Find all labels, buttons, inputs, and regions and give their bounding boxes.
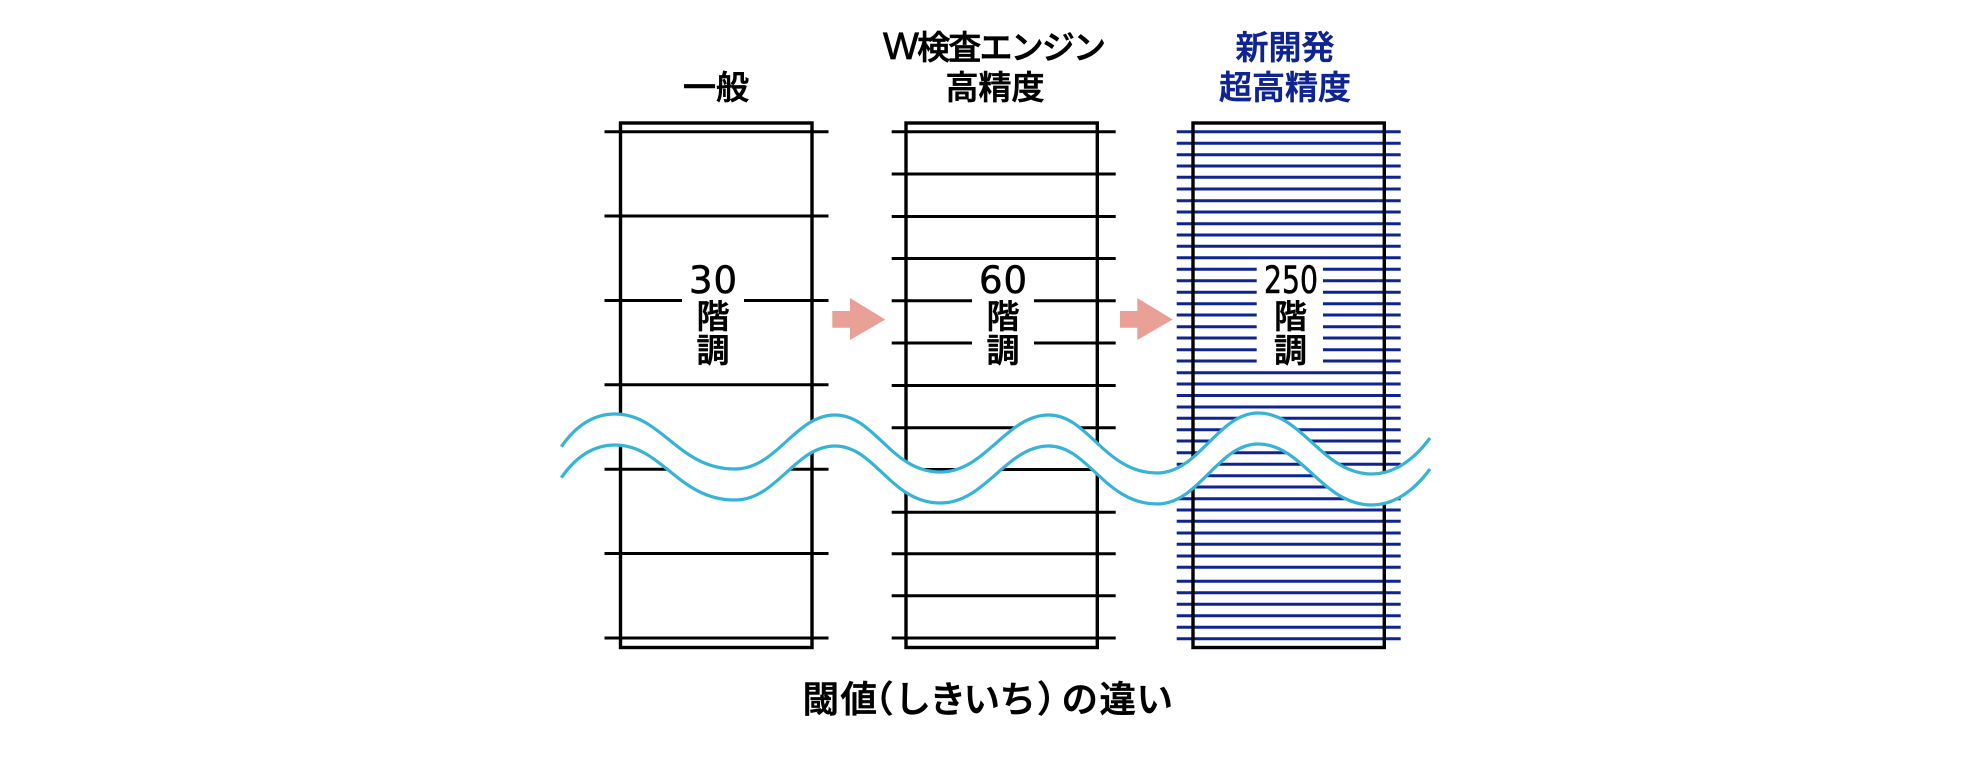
threshold lines: 60 levels bbox=[892, 132, 1116, 638]
chart: 30 levels bbox=[604, 123, 828, 648]
label: 30 levels: 30 bbox=[689, 259, 737, 302]
heading: W inspection engine high precision bbox=[883, 26, 1106, 106]
wave break band bbox=[561, 413, 1430, 505]
chart: 60 levels bbox=[892, 123, 1116, 648]
threshold lines: 250 levels bbox=[1177, 132, 1401, 639]
label: 250 levels bbox=[1264, 259, 1318, 369]
label: 250 levels: 調 bbox=[1274, 332, 1307, 369]
caption: threshold difference: 閾値（しきいち）の違い bbox=[802, 679, 1173, 720]
label: 250 levels: 階 bbox=[1274, 298, 1307, 335]
scale box: 250 levels bbox=[1193, 123, 1384, 648]
heading: W inspection engine high precision: W検査エンジン bbox=[883, 26, 1106, 68]
heading: newly developed ultra high precision bbox=[1219, 29, 1351, 106]
scale box: 30 levels bbox=[620, 123, 812, 648]
label: 250 levels: 250 bbox=[1264, 259, 1318, 302]
label: 60 levels: 調 bbox=[986, 332, 1020, 369]
chart: 250 levels bbox=[1177, 123, 1401, 648]
label: 60 levels: 60 bbox=[979, 259, 1027, 302]
arrow: high precision to ultra high precision bbox=[1120, 298, 1173, 340]
heading: newly developed ultra high precision: 新開発 bbox=[1236, 29, 1334, 66]
label: 60 levels: 階 bbox=[986, 298, 1020, 335]
arrow: general to high precision bbox=[832, 298, 885, 340]
heading: newly developed ultra high precision: 超高精度 bbox=[1219, 69, 1351, 106]
label: 30 levels: 調 bbox=[696, 332, 730, 369]
label: 30 levels: 階 bbox=[696, 298, 730, 335]
heading: general: 一般 bbox=[683, 69, 749, 106]
scale box: 60 levels bbox=[906, 123, 1097, 648]
label: 30 levels bbox=[689, 259, 737, 369]
threshold lines: 30 levels bbox=[604, 132, 828, 638]
label: 60 levels bbox=[979, 259, 1027, 369]
heading: W inspection engine high precision: 高精度 bbox=[946, 69, 1044, 106]
